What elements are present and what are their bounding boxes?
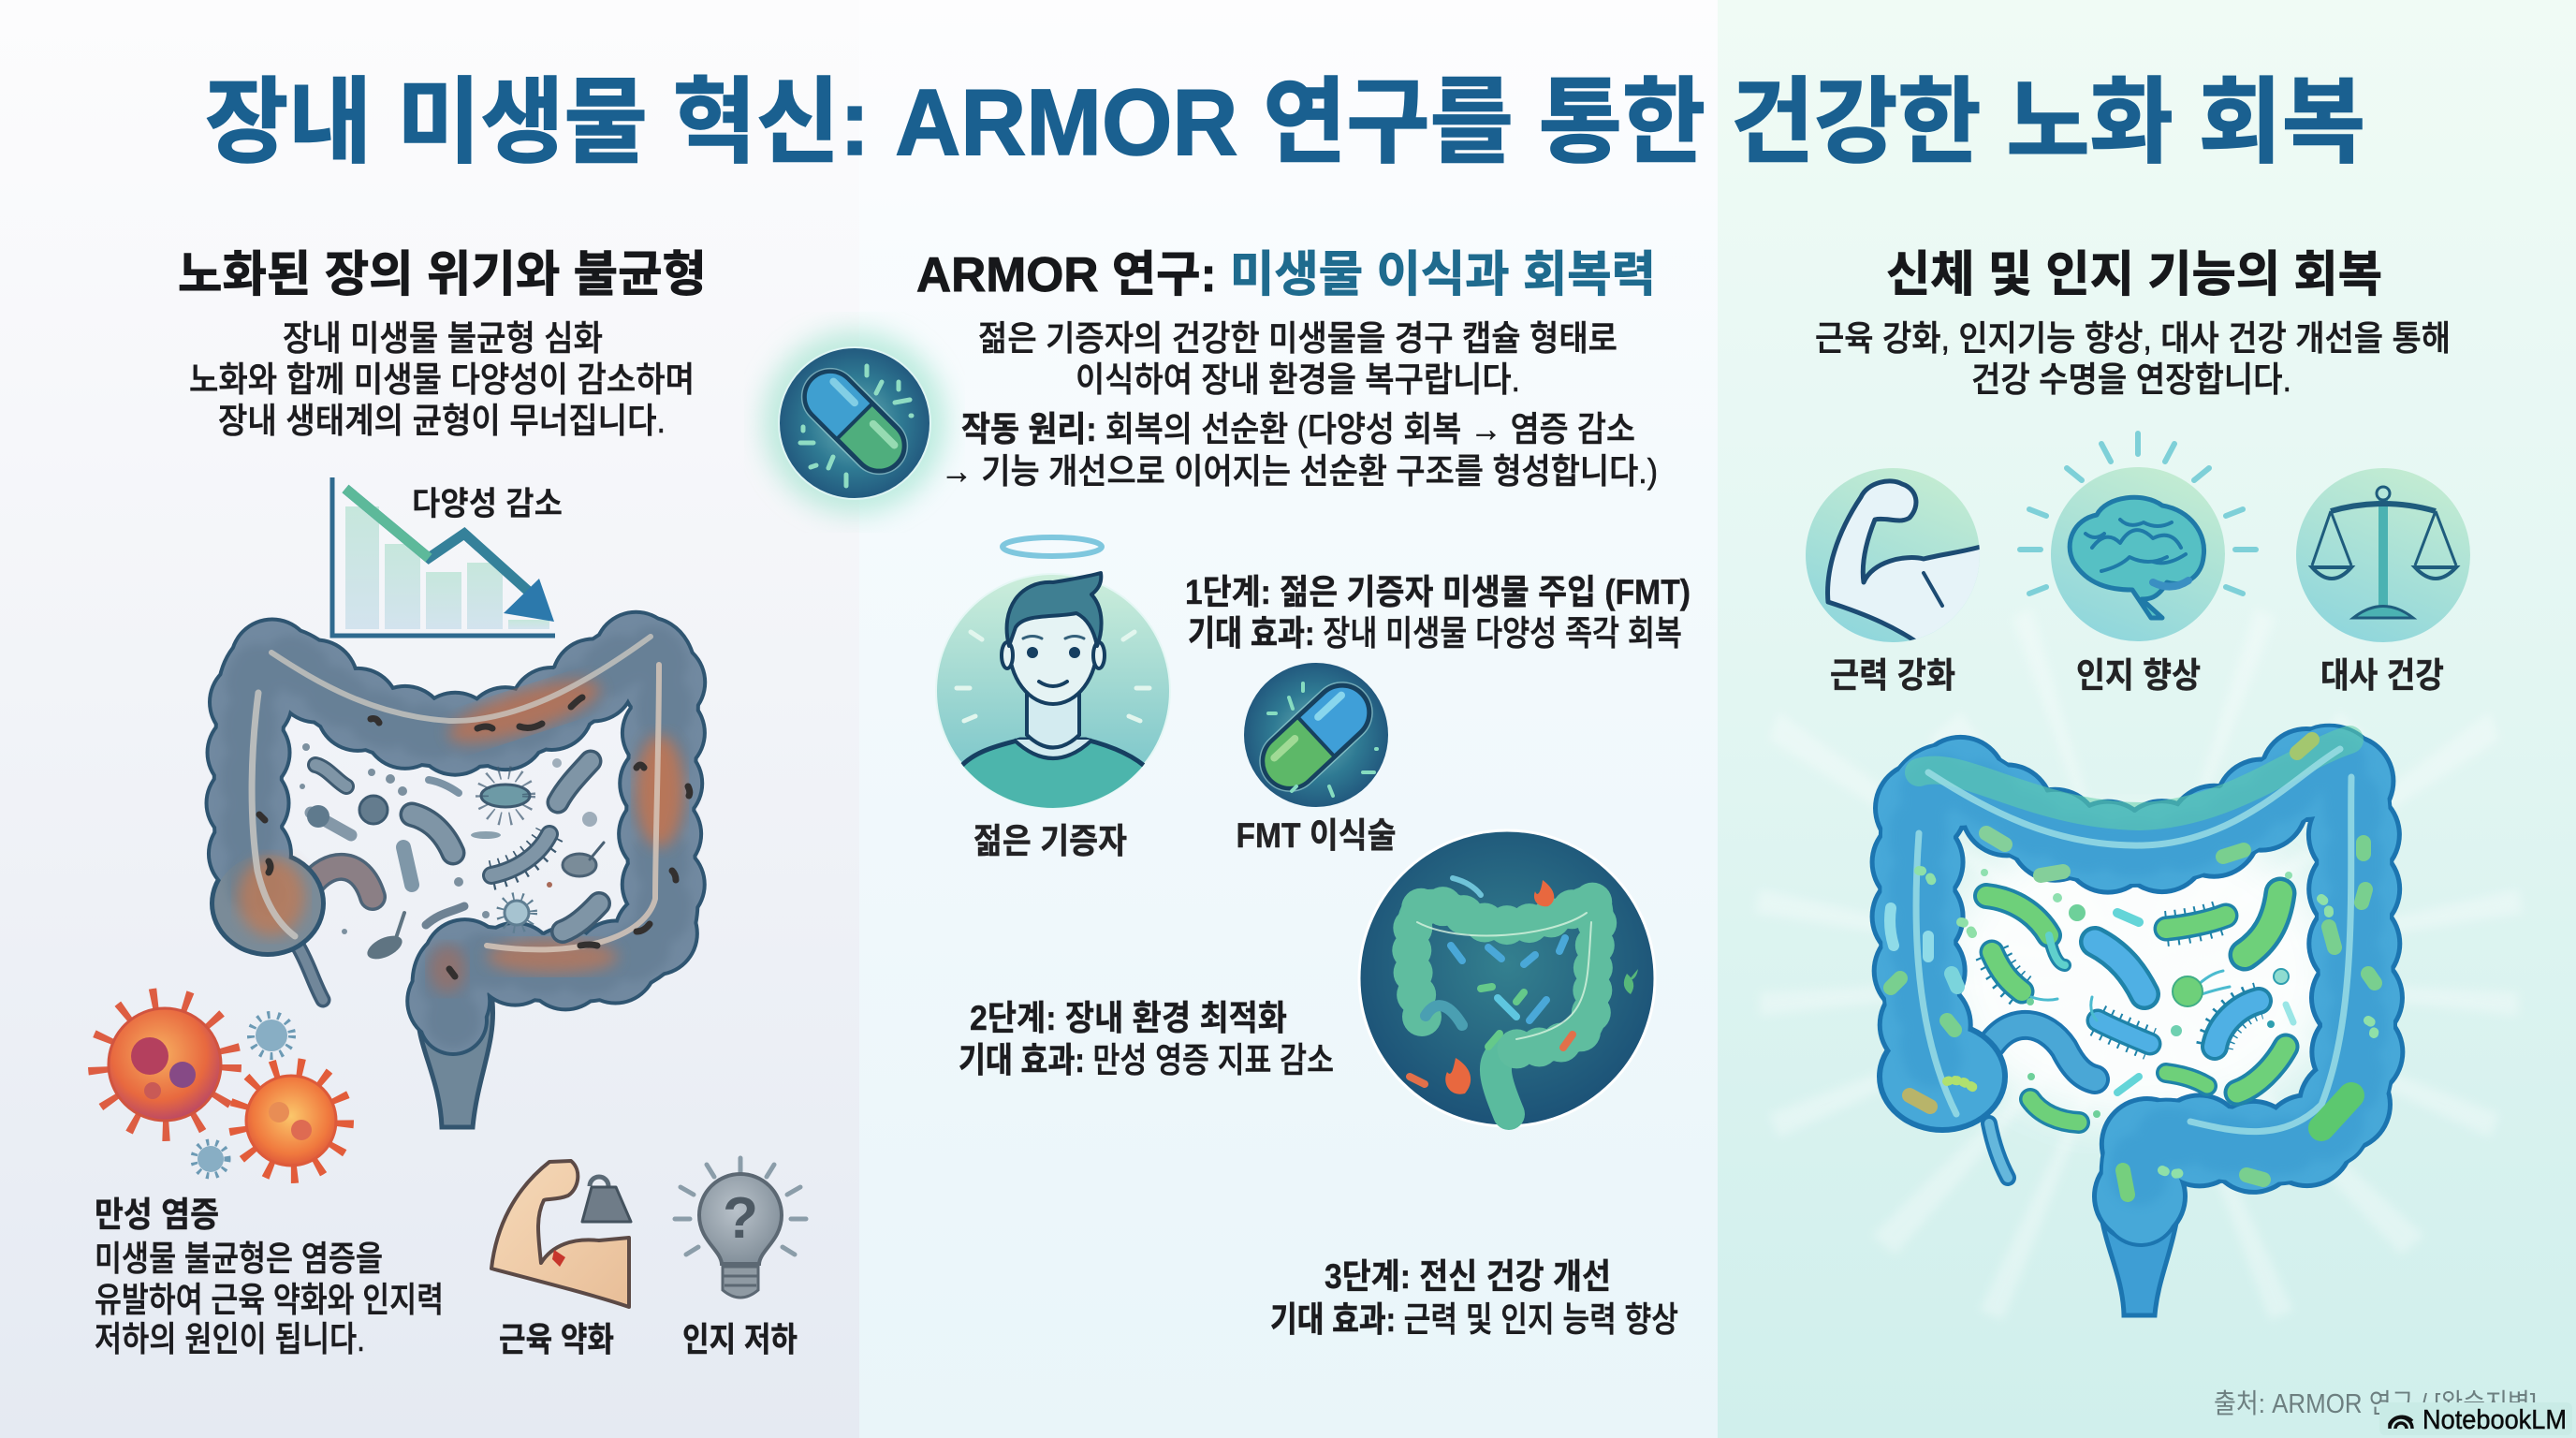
text block: left intro: 장내 생태계의 균형이 무너집니다. bbox=[218, 402, 666, 440]
label: metabolic health: 대사 건강 bbox=[2320, 656, 2444, 695]
step 2 text: 기대 효과: 만성 영증 지표 감소 bbox=[959, 1041, 1334, 1079]
text block: chronic inflammation: 미생물 불균형은 염증을 bbox=[95, 1240, 383, 1278]
label: cognition: 인지 향상 bbox=[2076, 656, 2201, 695]
bacteria: dull microbes bbox=[300, 743, 604, 964]
glow behind colon interior bbox=[1942, 824, 2335, 1123]
text block: chronic inflammation: 저하의 원인이 됩니다. bbox=[95, 1320, 365, 1358]
text block: left intro: 장내 미생물 불균형 심화 bbox=[283, 319, 603, 358]
decorative rays around colon bbox=[1755, 609, 2523, 1320]
label: strength: 근력 강화 bbox=[1830, 656, 1955, 695]
step 1 text bbox=[1185, 573, 1690, 653]
title: 장내 미생물 혁신: ARMOR 연구를 통한 건강한 노화 회복 bbox=[205, 70, 2365, 175]
label: cognitive decline: 인지 저하 bbox=[682, 1320, 798, 1358]
panel: recovery of function bbox=[1755, 248, 2572, 1435]
bacteria: healthy microbes bbox=[1981, 869, 2293, 1123]
step 2 text bbox=[959, 999, 1334, 1079]
icon: brain bbox=[2020, 433, 2256, 695]
panel: aged gut crisis bbox=[95, 248, 806, 1358]
text block: chronic inflammation bbox=[95, 1196, 444, 1358]
label: FMT transplant: FMT 이식술 bbox=[1236, 816, 1397, 855]
text block: chronic inflammation: 유발하여 근육 약화와 인지력 bbox=[95, 1281, 444, 1319]
text block: recovery intro bbox=[1815, 319, 2451, 399]
text block: recovery intro: 건강 수명을 연장합니다. bbox=[1971, 360, 2291, 399]
icon: cognitive decline bbox=[675, 1158, 806, 1358]
label: young donor: 젊은 기증자 bbox=[973, 822, 1127, 860]
icon: young donor bbox=[936, 537, 1170, 860]
icon: FMT capsule bbox=[1236, 663, 1397, 855]
heading: left: 노화된 장의 위기와 불균형 bbox=[178, 248, 707, 302]
text block: chronic inflammation: 만성 염증 bbox=[95, 1196, 219, 1234]
heading: middle: ARMOR 연구: 미생물 이식과 회복력 bbox=[916, 248, 1656, 302]
icon: strength bbox=[1806, 468, 1984, 695]
panel: ARMOR study bbox=[763, 248, 1690, 1339]
illustration: aged colon bbox=[210, 637, 690, 1127]
chart label: 다양성 감소 bbox=[412, 486, 563, 522]
illustration: healthy colon bbox=[1877, 740, 2375, 1315]
NotebookLM watermark: NotebookLM bbox=[2422, 1405, 2567, 1435]
source note: 출처: ARMOR 연구 / [완습지벽] bbox=[2214, 1388, 2537, 1419]
step 2 text: 2단계: 장내 환경 최적화 bbox=[970, 999, 1287, 1037]
text block: study intro: 작동 원리: 회복의 선순환 (다양성 회복 → 염증 감소 bbox=[961, 410, 1635, 448]
heading: right: 신체 및 인지 기능의 회복 bbox=[1886, 248, 2382, 302]
step 3 text bbox=[1270, 1257, 1678, 1339]
text block: study intro: 이식하여 장내 환경을 복구랍니다. bbox=[1076, 360, 1520, 399]
icon: weak muscle bbox=[491, 1161, 631, 1358]
step 3 text: 기대 효과: 근력 및 인지 능력 향상 bbox=[1270, 1300, 1678, 1339]
illustration: optimized gut circle bbox=[1359, 830, 1655, 1126]
step 1 text: 1단계: 젊은 기증자 미생물 주입 (FMT) bbox=[1185, 573, 1690, 611]
NotebookLM watermark bbox=[2379, 1402, 2572, 1435]
label: muscle weakness: 근육 약화 bbox=[499, 1320, 614, 1358]
chart: diversity decline bbox=[332, 477, 563, 636]
step 3 text: 3단계: 전신 건강 개선 bbox=[1325, 1257, 1611, 1296]
icon: cognitive decline: ? bbox=[723, 1186, 758, 1251]
text block: left intro bbox=[189, 319, 695, 440]
text block: study intro: 젊은 기증자의 건강한 미생물을 경구 캡슐 형태로 bbox=[978, 319, 1617, 358]
icon: inflammation cells bbox=[101, 1001, 344, 1176]
text block: recovery intro: 근육 강화, 인지기능 향상, 대사 건강 개선을 통해 bbox=[1815, 319, 2451, 358]
text block: left intro: 노화와 합께 미생물 다양성이 감소하며 bbox=[189, 360, 695, 399]
icon: capsule badge bbox=[763, 330, 946, 514]
step 1 text: 기대 효과: 장내 미생물 다양성 족각 회복 bbox=[1188, 614, 1682, 653]
icon: balance scale bbox=[2296, 468, 2470, 695]
text block: study intro bbox=[941, 319, 1658, 491]
text block: study intro: → 기능 개선으로 이어지는 선순환 구조를 형성합니다.) bbox=[941, 452, 1658, 491]
